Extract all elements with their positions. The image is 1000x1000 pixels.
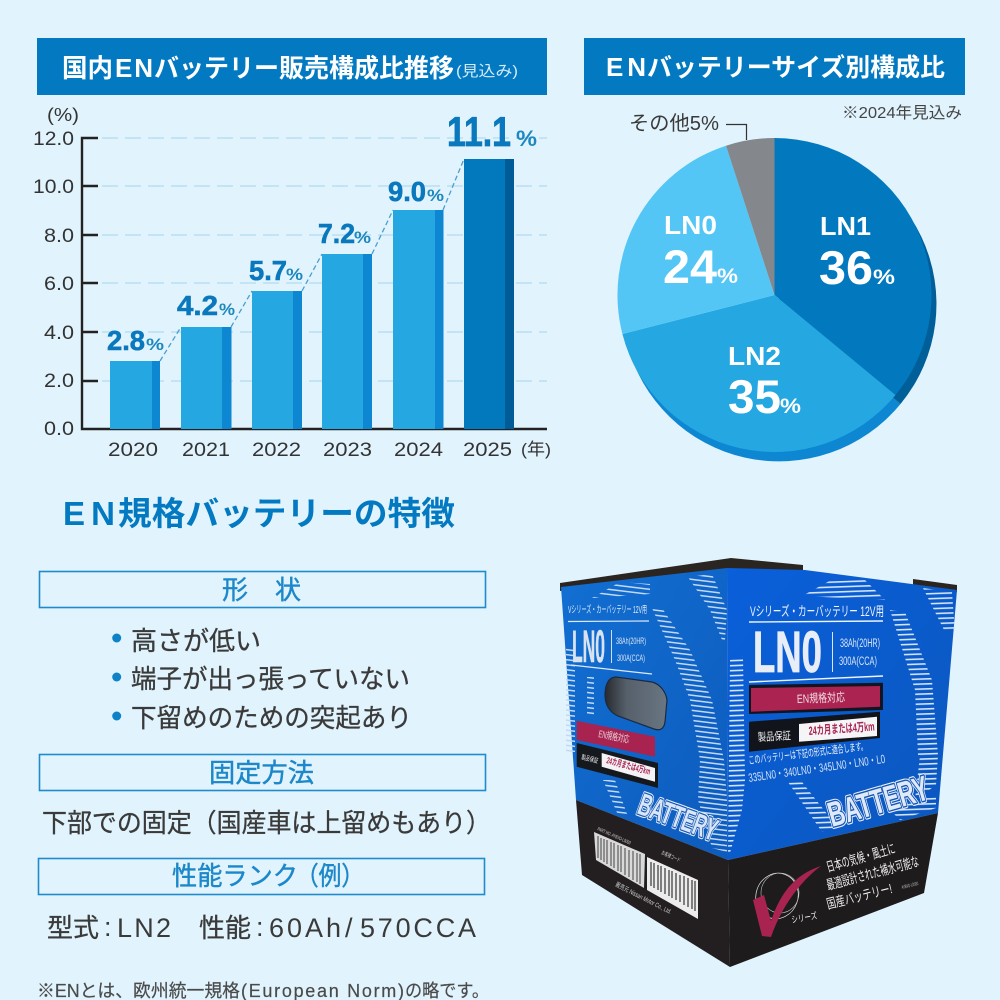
warranty band, left [577,743,658,788]
box top flaps [560,558,957,592]
pie label: LN2 35%: 35 [728,370,781,423]
bar value labels [107,108,537,356]
pie label: LN2 35% [728,341,801,423]
section header: shape: 状 [275,575,301,605]
box slogan [825,841,921,912]
warranty band, right: 24カ月または4万km [808,719,875,738]
pie label: LN0 24%: 24 [663,240,717,293]
box left face [561,568,728,860]
bullet list: shape features: 下留めのための突起あり [131,703,412,733]
BATTERY logo, left [634,787,723,848]
section header: shape: 形 [222,575,248,605]
section header: mounting method: 固定方法 [209,758,314,788]
text: mounting detail: 下部での固定（国産車は上留めもあり） [42,808,491,838]
section header: performance rank: （例） [296,861,364,891]
EN band, left: EN規格対応 [597,727,630,746]
x axis year labels: 2025 [463,439,512,461]
connector dashed lines [160,159,464,361]
x axis year labels [108,439,551,461]
left face text: LN0 [572,621,605,672]
text: example spec: : [104,912,112,942]
text: example spec: 型式 [47,913,99,943]
bar value labels: 7.2 [318,218,355,249]
y axis labels [33,105,79,440]
panel: sales share bar chart [33,38,551,461]
right face text: Vシリーズ・カーバッテリー 12V用 [750,604,884,619]
y axis labels: 12.0 [33,128,74,150]
text: example spec: : [256,912,264,942]
BATTERY logo, left: BATTERY [634,787,723,848]
EN band, right [749,683,883,714]
bar value labels: 11.1 [447,108,511,155]
section header: shape [40,572,486,608]
BATTERY logo, left: BATTERY [634,787,723,848]
x axis year labels: 2022 [252,439,301,461]
note: 2024 estimate: ※2024年見込み [842,104,962,122]
bar value labels: % [286,265,303,284]
manufacturer small print [596,826,682,916]
pie label: LN1 36%: LN1 [820,211,871,241]
y axis labels: 8.0 [44,225,74,247]
pie label: LN1 36%: 36 [819,241,873,294]
pie label: LN0 24% [663,210,738,293]
pie label: LN2 35%: % [780,395,801,418]
BATTERY logo, right: BATTERY [823,769,933,835]
bar value labels: 2.8 [107,325,145,356]
pie label: LN0 24%: % [717,265,738,288]
callout: others 5%: その他5% [629,112,719,135]
warranty band, right: 製品保証 [757,728,791,744]
title: EN standard battery features: EN [63,495,115,532]
heading: sales share trend [37,38,547,95]
box lower black band [576,800,938,967]
compatibility text: このバッテリーは下記の形式に適合します。 [748,740,867,767]
y axis labels: 6.0 [44,273,74,295]
title: EN standard battery features: 規格バッテリーの特徴 [118,495,455,532]
panel: mounting method [40,754,491,838]
part number, right: AYBVD-L0000 [901,881,919,891]
heading: sales share trend: EN [115,53,153,83]
bar value labels: % [146,335,164,354]
panel: performance rank [38,858,484,943]
barcode right [647,857,698,919]
warranty band, left: 24カ月または4万km [605,755,652,777]
x axis year labels: (年) [521,440,551,459]
x axis year labels: 2021 [182,439,230,461]
pie slices [617,138,931,452]
box slogan: 最適設計された補水可能な [825,854,921,893]
bullet list: shape features [112,626,412,733]
section header: performance rank: 性能ランク [172,861,298,891]
right face text [749,604,884,685]
y axis labels: 10.0 [33,176,74,198]
pie label: LN0 24%: LN0 [664,210,717,240]
text: example spec: 570CCA [360,913,476,943]
panel: shape [40,572,486,733]
panel: size share pie chart [584,38,965,461]
text: example spec: LN2 [117,913,171,943]
bar value labels: % [354,228,371,247]
chart gridlines and axes [82,138,547,429]
section header: mounting method [40,754,486,790]
footnote [37,981,489,1000]
BATTERY logo, right: BATTERY [823,769,933,835]
bullet list: shape features: 端子が出っ張っていない [131,664,410,694]
handle cut-out [605,677,667,730]
text: example spec [47,912,476,943]
manufacturer small print: お客様コード [660,849,682,864]
x axis year labels: 2023 [323,439,372,461]
left face text: 300A(CCA) [617,653,645,663]
right face text: 38Ah(20HR) [840,638,880,650]
barcode left [594,832,645,888]
compatibility text [747,740,886,785]
heading: size share: EN [606,52,646,82]
manufacturer small print: PART NO. AYBVD-L0000 [596,826,632,847]
left face text [568,603,652,674]
bar value labels: % [427,186,444,205]
callout: others 5% [629,112,746,140]
bar value labels: 9.0 [388,176,426,207]
pie label: LN2 35%: LN2 [728,341,781,371]
section header: performance rank [38,858,484,894]
x axis year labels: 2024 [394,439,443,461]
V series logo: シリーズ [790,910,818,925]
text: example spec: 60Ah [269,913,341,943]
left face text: Vシリーズ・カーバッテリー 12V用 [568,603,647,616]
pie depth shadow [627,147,936,461]
bar value labels: % [219,300,235,319]
warranty band, right [749,712,880,752]
bullet list: shape features: 高さが低い [131,626,261,656]
left face text: 38Ah(20HR) [616,636,646,646]
left face hatch arcs [566,574,727,852]
BATTERY logo, right [823,769,933,835]
heading: size share: バッテリーサイズ別構成比 [647,53,945,82]
bar value labels: 4.2 [177,290,218,321]
right face hatch arcs [728,578,955,853]
y axis labels: 4.0 [44,322,74,344]
box right face [727,568,957,860]
right face text: 300A(CCA) [839,656,877,668]
pie label: LN1 36%: % [873,266,895,289]
heading: sales share trend: バッテリー販売構成比推移 [154,55,454,83]
bars [110,159,514,429]
x axis year labels: 2020 [108,439,158,461]
text: example spec: / [345,913,353,943]
EN band, left [577,721,655,757]
bar value labels: % [516,126,537,151]
V series logo [749,866,821,937]
battery box photo [560,558,957,967]
right face text: LN0 [753,620,822,685]
manufacturer small print: 販売元 Nissan Motor Co., Ltd. [614,880,674,916]
heading: sales share trend: (見込み) [456,63,518,80]
box slogan: 国産バッテリー! [825,881,894,912]
box slogan: 日本の気候・風土に [825,841,897,875]
y axis labels: (%) [47,105,79,125]
heading: sales share trend: 国内 [62,55,113,83]
y axis labels: 2.0 [44,370,74,392]
compatibility text: 335LN0・340LN0・345LN0・LN0・L0 [747,752,886,785]
EN band, right: EN規格対応 [797,689,845,706]
pie label: LN1 36% [819,211,895,294]
text: example spec: 性能 [199,913,251,943]
bar value labels: 5.7 [249,255,287,286]
heading: size share [584,38,965,95]
warranty band, left: 製品保証 [581,752,600,765]
y axis labels: 0.0 [44,418,74,440]
